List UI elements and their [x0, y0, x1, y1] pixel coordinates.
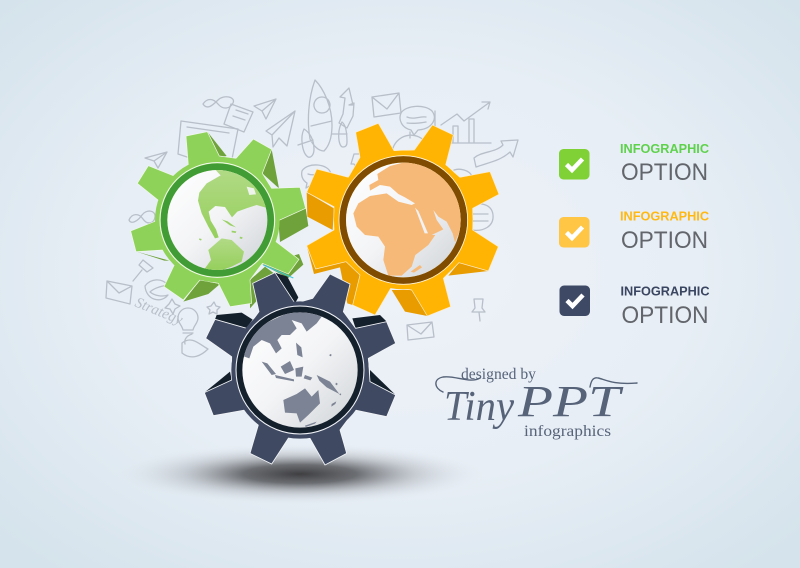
text: infographics: infographics — [524, 423, 611, 440]
icon: pin — [133, 260, 153, 281]
label: strategy sketch text: Strategy — [133, 295, 185, 329]
option 3 — [560, 284, 710, 329]
ground shadow — [112, 443, 488, 505]
map: africa and eurasia — [353, 162, 463, 276]
green gear extrusion — [137, 132, 308, 308]
icon: stopwatch — [393, 132, 427, 148]
icon: green check box — [559, 149, 590, 180]
navy ring outline — [236, 306, 364, 434]
orange gear extrusion — [307, 192, 488, 316]
navy ring — [240, 310, 360, 430]
icon: envelope bottom — [407, 322, 434, 340]
cyan edge highlight — [263, 265, 293, 278]
icon: speech bubble — [400, 106, 434, 135]
heading: infographic green: INFOGRAPHIC — [620, 142, 709, 156]
orange ring outline — [339, 156, 468, 284]
logo: designed by Tiny PPT — [436, 366, 637, 440]
text: Tiny: Tiny — [444, 384, 514, 430]
icon: yellow check box — [559, 217, 590, 248]
icon: stars — [165, 299, 220, 314]
icon: rocket booster left — [302, 129, 314, 157]
icon: note — [224, 104, 253, 132]
icon: chart — [435, 102, 491, 143]
icon: small cup — [351, 154, 364, 169]
icon: rocket — [298, 80, 347, 151]
heading: infographic yellow: INFOGRAPHIC — [620, 210, 709, 224]
orange gear — [307, 123, 499, 316]
navy globe — [240, 310, 358, 428]
icon: rocket booster right — [339, 122, 347, 147]
navy gear — [204, 273, 396, 465]
text: PPT: PPT — [517, 377, 625, 426]
icon: navy check box — [560, 286, 590, 316]
icon: speech right — [470, 204, 493, 230]
icon: infinity left — [129, 211, 155, 223]
map: asia and australia — [240, 310, 341, 427]
icon: envelope top — [372, 93, 401, 117]
heading: infographic navy: INFOGRAPHIC — [620, 284, 710, 298]
green gear face — [131, 132, 306, 307]
green ring outline — [160, 163, 275, 277]
orange gear hub — [334, 151, 473, 289]
icon: bulb — [178, 308, 198, 333]
green globe — [167, 168, 268, 271]
icon: envelope left — [106, 281, 132, 304]
logo swash decoration — [436, 377, 637, 392]
text: option: OPTION — [621, 227, 708, 254]
navy gear face — [204, 273, 396, 465]
icon: knot — [145, 280, 168, 300]
green gear hub — [155, 158, 280, 282]
icon: arrow up — [339, 88, 354, 128]
icon: curved arrow — [474, 140, 518, 167]
icon: tablet — [178, 121, 238, 159]
orange gear face — [307, 123, 499, 316]
text: option: OPTION — [622, 302, 708, 329]
icon: speech left — [302, 165, 331, 188]
orange ring — [343, 159, 464, 281]
icon: speech small right — [454, 169, 472, 176]
text: option: OPTION — [621, 159, 708, 186]
navy gear extrusion — [204, 273, 396, 395]
option 2 — [559, 210, 709, 254]
green ring — [164, 167, 271, 273]
green gear — [131, 132, 308, 308]
navy gear hub — [231, 301, 369, 439]
map: red sea — [415, 208, 428, 233]
option 1 — [559, 142, 709, 186]
icon: pin right — [472, 299, 485, 321]
icon: left plane — [145, 152, 167, 168]
doodle sketches — [106, 80, 518, 357]
icon: small plane — [254, 99, 276, 119]
icon: knot lower — [182, 334, 208, 357]
text: designed by: designed by — [461, 366, 536, 383]
orange globe — [346, 162, 463, 277]
icon: large plane — [266, 111, 295, 147]
icon: infinity top — [203, 97, 233, 108]
map: americas — [198, 168, 268, 271]
